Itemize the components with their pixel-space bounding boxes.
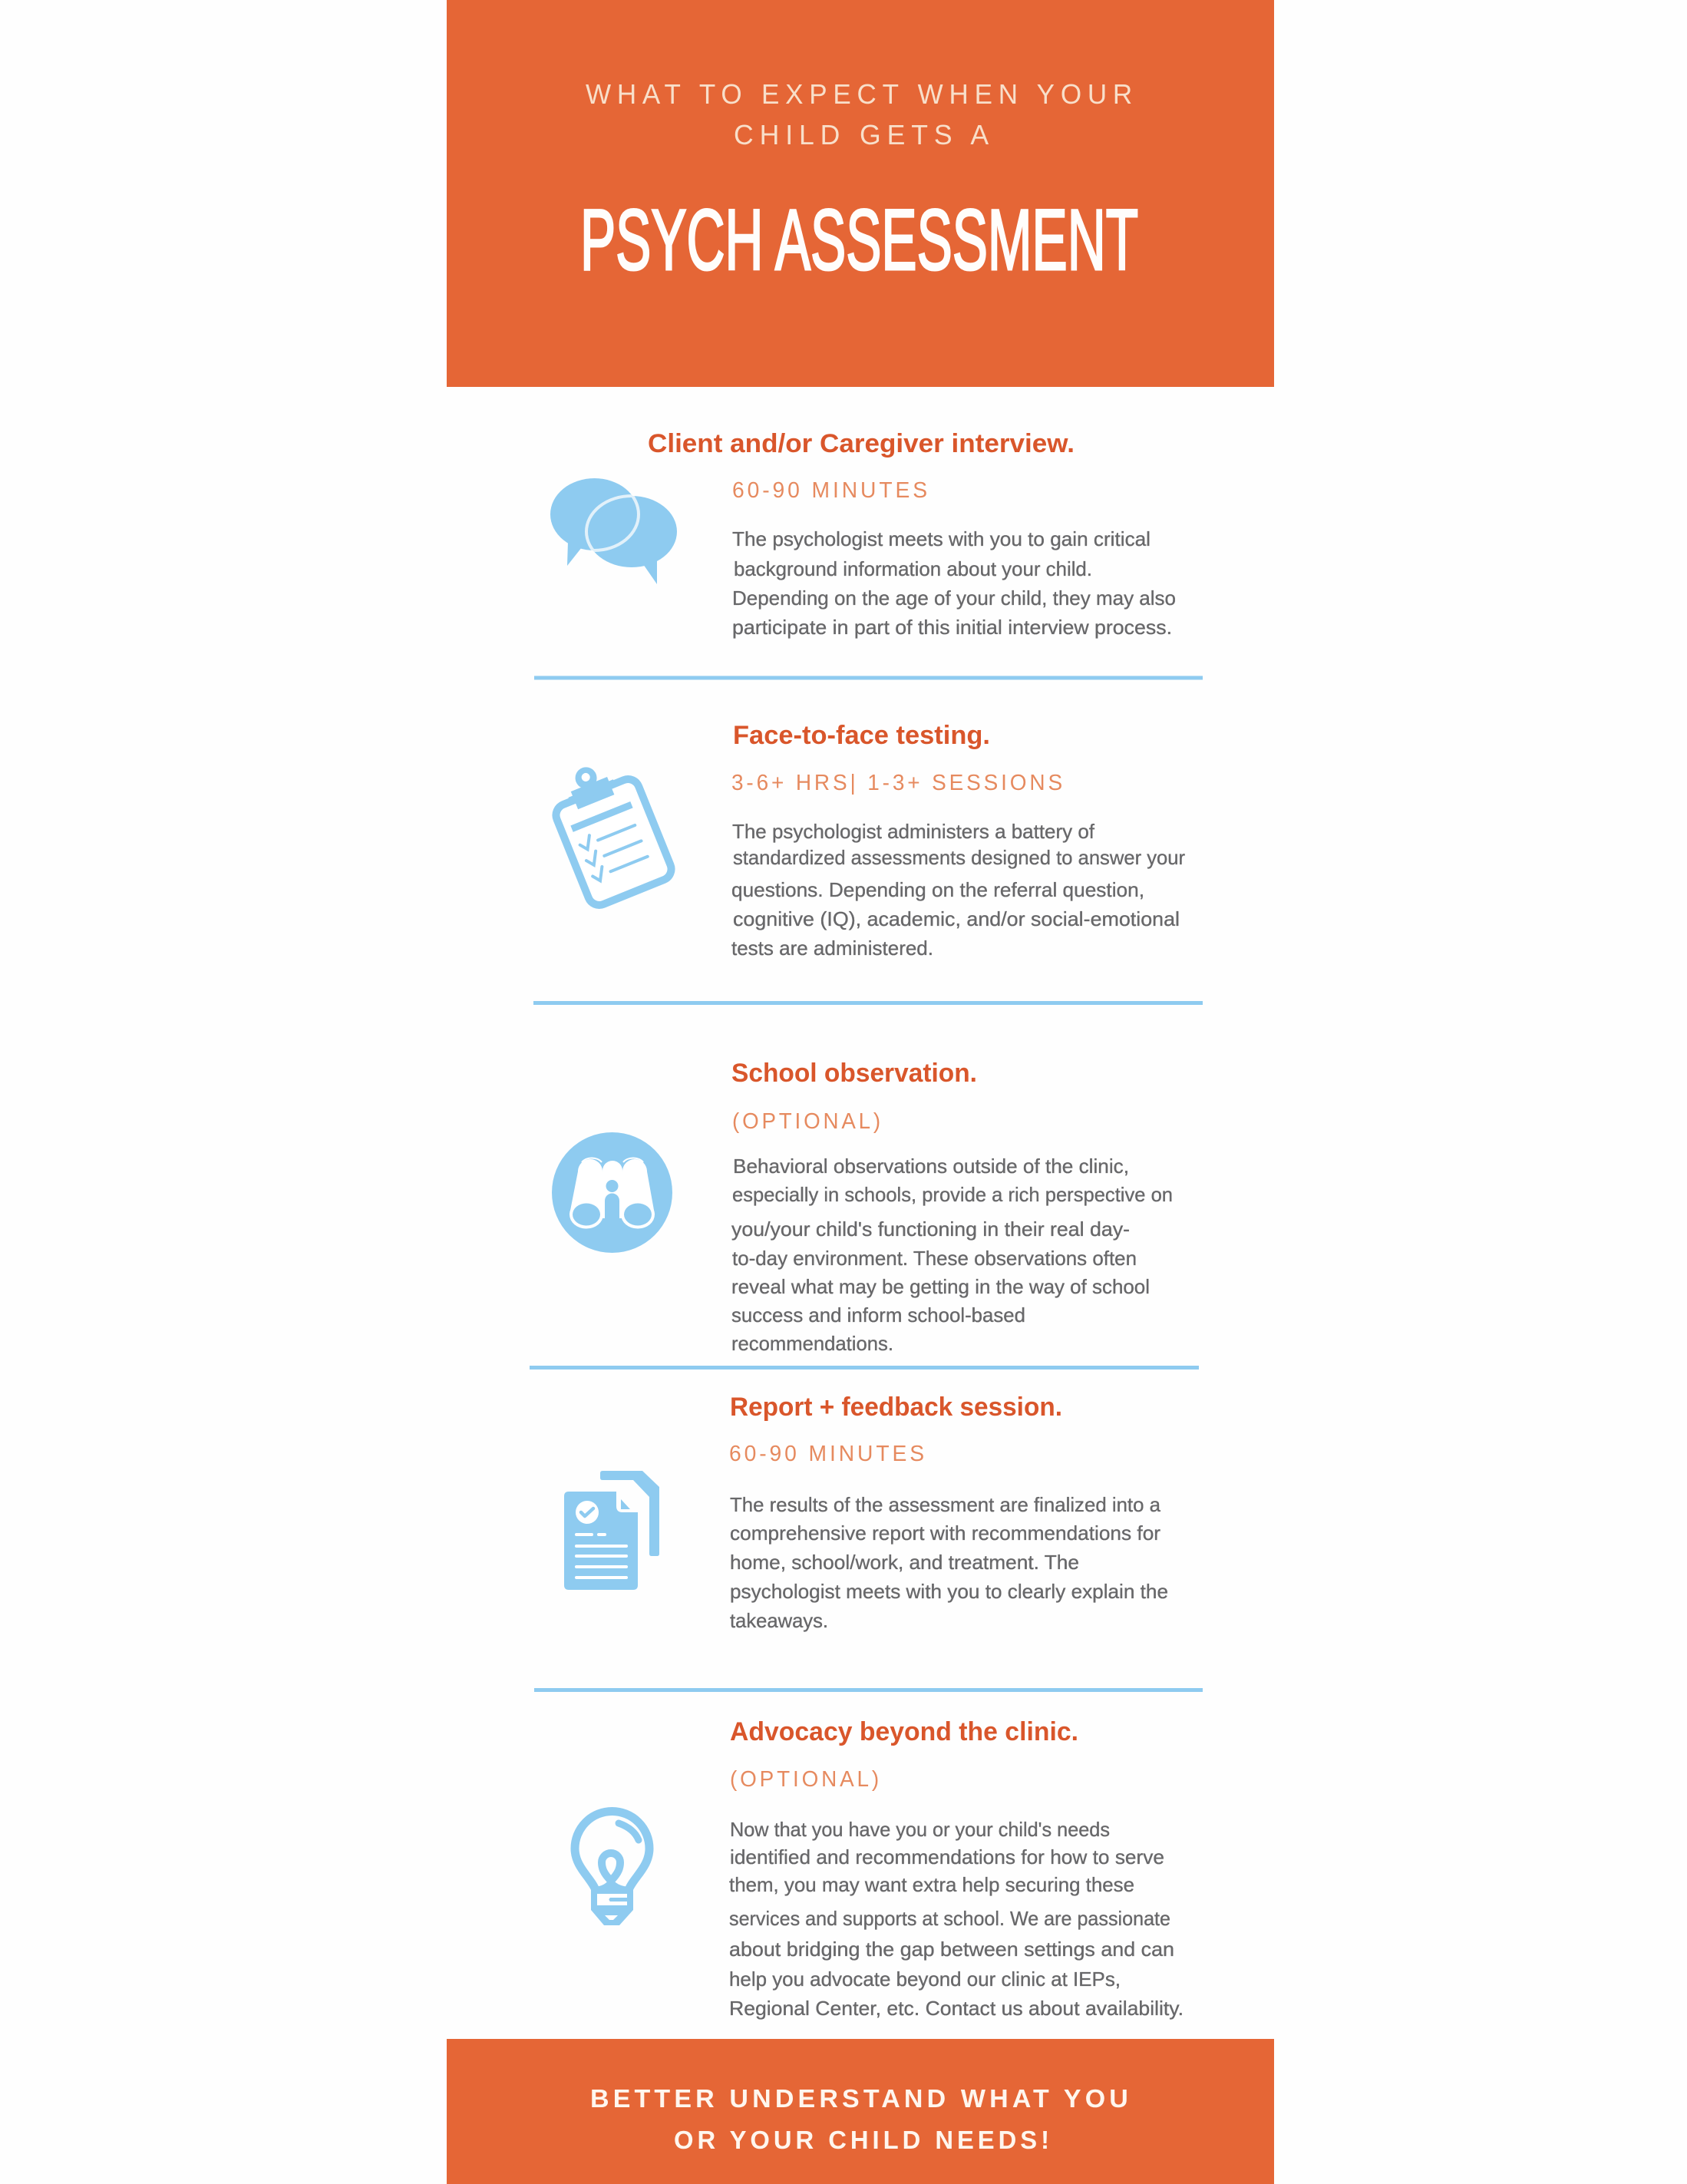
body text: background information about your child. bbox=[734, 557, 1092, 580]
body text: psychologist meets with you to clearly explain the bbox=[730, 1580, 1168, 1603]
body text: tests are administered. bbox=[731, 937, 933, 960]
heading: Client and/or Caregiver interview. bbox=[648, 429, 1075, 458]
header intro text bbox=[586, 78, 1138, 150]
body text bbox=[730, 1493, 1168, 1632]
body text: about bridging the gap between settings and can bbox=[729, 1938, 1174, 1961]
body text: questions. Depending on the referral question, bbox=[731, 878, 1144, 901]
footer call to action: OR YOUR CHILD NEEDS! bbox=[674, 2126, 1053, 2154]
body text: cognitive (IQ), academic, and/or social-emotional bbox=[733, 907, 1180, 930]
body text: participate in part of this initial interview process. bbox=[732, 616, 1172, 639]
body text: identified and recommendations for how to serve bbox=[730, 1845, 1164, 1868]
icon: speech bubbles bbox=[550, 478, 677, 584]
body text: comprehensive report with recommendations for bbox=[730, 1522, 1160, 1545]
body text: to-day environment. These observations often bbox=[732, 1247, 1137, 1270]
body text: success and inform school-based bbox=[731, 1303, 1025, 1327]
body text: you/your child's functioning in their real day- bbox=[731, 1218, 1130, 1241]
body text: recommendations. bbox=[731, 1332, 893, 1355]
panel: face-to-face testing bbox=[543, 721, 1185, 960]
body text bbox=[729, 1818, 1184, 2020]
icon: binoculars bbox=[552, 1132, 672, 1253]
panel: report and feedback session bbox=[564, 1393, 1168, 1632]
duration: 3-6+ HRS| 1-3+ SESSIONS bbox=[731, 771, 1065, 795]
icon: light bulb bbox=[575, 1812, 649, 1925]
body text: takeaways. bbox=[730, 1609, 828, 1632]
duration: 60-90 MINUTES bbox=[732, 478, 930, 503]
body text bbox=[732, 527, 1176, 639]
body text: reveal what may be getting in the way of school bbox=[731, 1275, 1150, 1298]
body text bbox=[731, 820, 1185, 960]
duration: 60-90 MINUTES bbox=[729, 1442, 927, 1466]
optional tag: (OPTIONAL) bbox=[730, 1767, 882, 1792]
body text: especially in schools, provide a rich perspective on bbox=[732, 1183, 1173, 1206]
footer panel bbox=[447, 2039, 1274, 2184]
header intro text: CHILD GETS A bbox=[734, 119, 995, 150]
body text: The psychologist administers a battery of bbox=[732, 820, 1095, 843]
header panel bbox=[447, 0, 1274, 387]
icon: clipboard bbox=[543, 751, 675, 908]
panel: school observation bbox=[552, 1059, 1173, 1355]
body text: Depending on the age of your child, they may also bbox=[732, 586, 1176, 610]
heading: Advocacy beyond the clinic. bbox=[730, 1717, 1078, 1746]
body text: standardized assessments designed to answer your bbox=[733, 846, 1185, 869]
body text: them, you may want extra help securing these bbox=[729, 1873, 1134, 1896]
heading: Face-to-face testing. bbox=[733, 721, 990, 750]
icon: documents bbox=[564, 1471, 659, 1590]
footer call to action bbox=[590, 2084, 1132, 2154]
body text: Now that you have you or your child's needs bbox=[730, 1818, 1110, 1841]
optional tag: (OPTIONAL) bbox=[732, 1109, 883, 1134]
body text: Behavioral observations outside of the clinic, bbox=[733, 1155, 1129, 1178]
panel: client and caregiver interview bbox=[550, 429, 1176, 639]
body text: The psychologist meets with you to gain critical bbox=[732, 527, 1151, 550]
body text bbox=[731, 1155, 1173, 1355]
body text: Regional Center, etc. Contact us about availability. bbox=[729, 1997, 1184, 2020]
panel: advocacy beyond the clinic bbox=[575, 1717, 1184, 2020]
header intro text: WHAT TO EXPECT WHEN YOUR bbox=[586, 78, 1138, 110]
body text: home, school/work, and treatment. The bbox=[730, 1551, 1079, 1574]
title: PSYCH ASSESSMENT bbox=[580, 192, 1138, 288]
body text: services and supports at school. We are passionate bbox=[729, 1907, 1170, 1930]
body text: help you advocate beyond our clinic at IEPs, bbox=[729, 1968, 1121, 1991]
heading: School observation. bbox=[731, 1059, 977, 1088]
heading: Report + feedback session. bbox=[730, 1393, 1062, 1422]
body text: The results of the assessment are finalized into a bbox=[730, 1493, 1161, 1516]
footer call to action: BETTER UNDERSTAND WHAT YOU bbox=[590, 2084, 1132, 2113]
